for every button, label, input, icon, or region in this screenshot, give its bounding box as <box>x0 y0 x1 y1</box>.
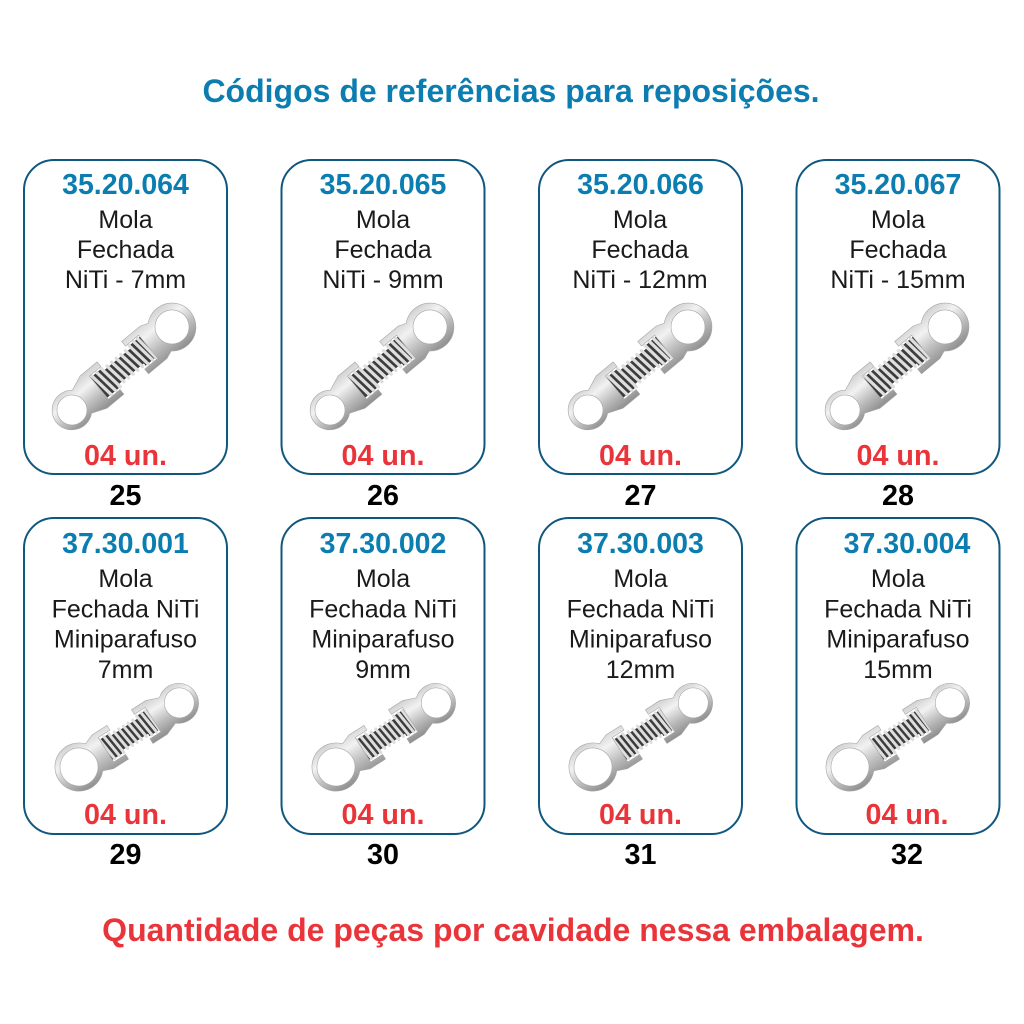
description: Miniparafuso <box>54 626 197 654</box>
description: Miniparafuso <box>569 626 712 654</box>
code 37.30.002: 37.30.002 <box>320 528 446 560</box>
description: Mola <box>871 565 925 593</box>
quantity: 04 un. <box>342 440 424 472</box>
description: 12mm <box>606 656 675 684</box>
description: Mola <box>871 206 925 234</box>
code 35.20.067: 35.20.067 <box>835 169 961 201</box>
description: Fechada NiTi <box>824 595 972 623</box>
code 37.30.004: 37.30.004 <box>844 528 971 560</box>
cavity number 32: 32 <box>891 839 923 871</box>
cavity number 31: 31 <box>625 839 656 871</box>
description: Fechada <box>849 236 947 264</box>
description: Fechada NiTi <box>52 595 199 623</box>
panel: 37.30.001 <box>24 518 227 834</box>
cavity number 25: 25 <box>110 480 141 512</box>
code 37.30.001: 37.30.001 <box>62 528 189 560</box>
quantity: 04 un. <box>84 799 167 831</box>
description: Fechada <box>77 236 174 264</box>
description: Miniparafuso <box>826 626 970 654</box>
quantity: 04 un. <box>342 799 424 831</box>
title: Códigos de referências para reposições. <box>202 73 820 109</box>
panel: 35.20.066 <box>539 160 742 474</box>
quantity: 04 un. <box>857 440 939 472</box>
icon: closed spring for miniscrew <box>303 672 465 800</box>
description: Mola <box>613 565 668 593</box>
icon: closed spring <box>299 293 464 441</box>
cavity number 30: 30 <box>367 839 399 871</box>
panel: 35.20.065 <box>282 160 484 474</box>
description: Fechada NiTi <box>309 595 457 623</box>
description: Mola <box>613 206 667 234</box>
description: Mola <box>98 565 153 593</box>
cavity number 26: 26 <box>367 480 399 512</box>
description: Fechada <box>334 236 432 264</box>
icon: closed spring for miniscrew <box>817 672 979 800</box>
cavity number 27: 27 <box>625 480 656 512</box>
description: NiTi - 15mm <box>830 266 966 294</box>
quantity: 04 un. <box>599 440 682 472</box>
description: Mola <box>356 565 410 593</box>
description: NiTi - 7mm <box>65 266 186 294</box>
panel: 35.20.064 <box>24 160 227 474</box>
description: Miniparafuso <box>311 626 455 654</box>
icon: closed spring for miniscrew <box>46 672 208 800</box>
description: Mola <box>356 206 410 234</box>
description: 9mm <box>355 656 411 684</box>
description: NiTi - 12mm <box>572 266 708 294</box>
quantity: 04 un. <box>84 440 167 472</box>
panel: 37.30.002 <box>282 518 484 834</box>
code 35.20.064: 35.20.064 <box>62 169 189 201</box>
quantity: 04 un. <box>599 799 682 831</box>
panel: 37.30.003 <box>539 518 742 834</box>
description: 15mm <box>863 656 933 684</box>
description: Fechada <box>591 236 689 264</box>
panel: 37.30.004 <box>796 518 1000 834</box>
description: Mola <box>98 206 153 234</box>
description: Fechada NiTi <box>567 595 714 623</box>
description: NiTi - 9mm <box>322 266 444 294</box>
code 35.20.065: 35.20.065 <box>320 169 447 201</box>
description: 7mm <box>98 656 153 684</box>
code 37.30.003: 37.30.003 <box>577 528 704 560</box>
icon: closed spring <box>557 293 722 441</box>
cavity number 29: 29 <box>110 839 141 871</box>
icon: closed spring <box>814 293 979 441</box>
panel: 35.20.067 <box>796 160 1000 474</box>
footer note: Quantidade de peças por cavidade nessa embalagem. <box>102 912 924 948</box>
cavity number 28: 28 <box>882 480 914 512</box>
code 35.20.066: 35.20.066 <box>577 169 704 201</box>
icon: closed spring for miniscrew <box>560 672 722 800</box>
quantity: 04 un. <box>866 799 948 831</box>
icon: closed spring <box>41 293 206 441</box>
